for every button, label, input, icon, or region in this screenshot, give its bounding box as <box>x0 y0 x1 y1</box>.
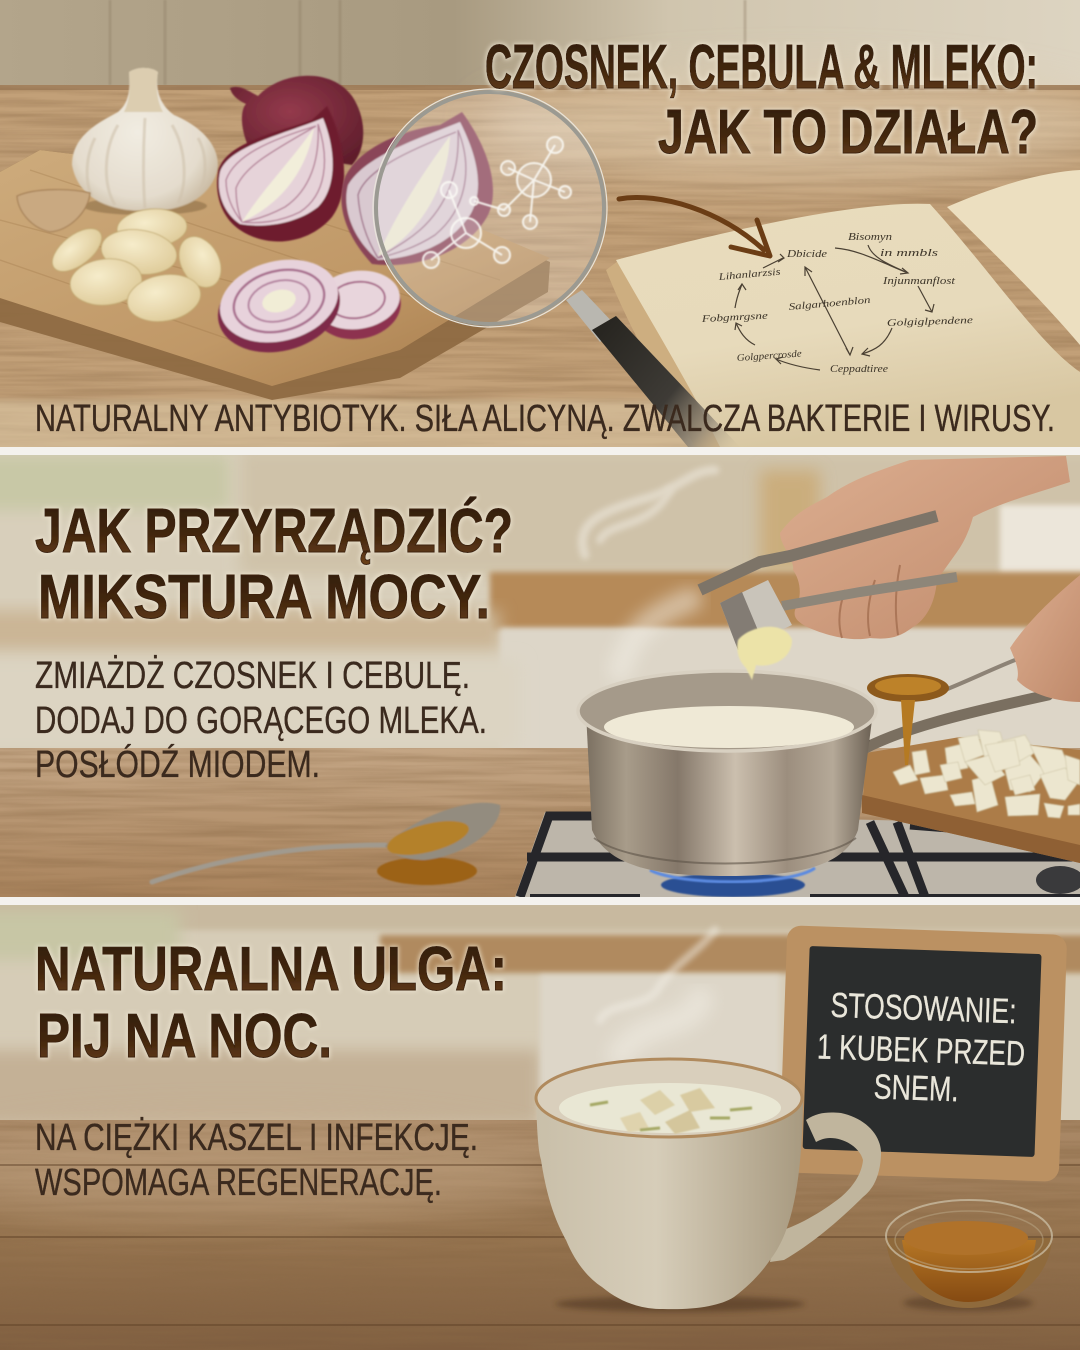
title <box>483 41 1038 157</box>
icon: hand with honey spoon <box>867 575 1080 765</box>
blurred kitchen background <box>0 450 1080 755</box>
heading <box>35 935 507 1071</box>
mug body <box>536 1098 803 1309</box>
onion bits in milk <box>590 1088 752 1134</box>
icon: garlic bulb <box>72 68 218 215</box>
garlic press <box>700 516 957 650</box>
steam <box>582 470 715 670</box>
book: right page <box>947 170 1080 345</box>
icon: peeled garlic cloves <box>52 208 222 322</box>
book with cycle diagram <box>606 170 1080 447</box>
wooden table <box>0 1120 1080 1350</box>
icon: halved red onion <box>217 106 344 242</box>
cycle diagram handwriting <box>700 232 974 375</box>
heading: PIJ NA NOC. <box>37 1002 332 1071</box>
benefits text: NA CIĘŻKI KASZEL I INFEKCJĘ. <box>35 1116 478 1159</box>
icon: glass bowl of honey <box>886 1200 1052 1311</box>
cycle diagram handwriting: Golgpercrosde <box>736 348 803 364</box>
arrow: curved brown arrow to the book <box>619 198 770 256</box>
benefits text: WSPOMAGA REGENERACJĘ. <box>35 1162 442 1204</box>
panel: how it works <box>0 0 1080 460</box>
hand <box>780 456 1070 639</box>
chalkboard sign <box>779 925 1067 1182</box>
chalkboard sign: SNEM. <box>873 1067 959 1109</box>
cycle diagram handwriting: Ceppadtiree <box>830 364 889 375</box>
cycle diagram handwriting: Dbicide <box>786 249 828 260</box>
icon: garlic clove in skin <box>17 190 90 232</box>
steam <box>600 930 715 1055</box>
cycle diagram handwriting: in mmbls <box>880 248 938 259</box>
heading: JAK PRZYRZĄDZIĆ? <box>35 497 513 566</box>
mug handle <box>770 1113 881 1262</box>
cycle diagram handwriting: Bisomyn <box>848 232 892 243</box>
icon: onion slices <box>217 258 402 354</box>
panel: how to prepare <box>0 450 1080 897</box>
cycle diagram handwriting: Fobgmrgsne <box>700 311 769 325</box>
stove and grates <box>515 812 1080 897</box>
blurred kitchen background <box>0 900 1080 1125</box>
heading: NATURALNA ULGA: <box>35 935 507 1004</box>
pan body <box>586 712 873 876</box>
icon: second halved onion under the lens <box>341 112 493 265</box>
heading <box>35 497 513 632</box>
milk surface <box>559 1083 781 1133</box>
recipe text: ZMIAŻDŻ CZOSNEK I CEBULĘ. <box>35 654 470 697</box>
icon: magnifying glass with molecules <box>373 89 740 447</box>
chopped onion <box>893 730 1080 818</box>
recipe text: POSŁÓDŹ MIODEM. <box>35 743 320 786</box>
icon: spoon on the table with honey <box>152 803 500 885</box>
benefits text <box>35 1116 478 1204</box>
magnifier handle <box>566 290 740 447</box>
icon: whole red onion <box>230 76 363 165</box>
pan handle <box>858 695 1048 752</box>
recipe text <box>35 654 487 786</box>
magnifier lens <box>373 89 607 327</box>
cutting board with chopped onion <box>862 730 1080 863</box>
milk <box>604 706 854 748</box>
saucepan with milk <box>578 671 1048 876</box>
book: left page <box>616 204 1080 447</box>
cycle diagram handwriting: Golgiglpendene <box>887 315 974 329</box>
panel: natural relief <box>0 900 1080 1350</box>
cutting board <box>0 150 550 400</box>
cycle diagram handwriting: Lihanlarzsis <box>717 267 781 283</box>
molecule glyphs <box>423 137 571 268</box>
heading: MIKSTURA MOCY. <box>38 563 490 632</box>
icon: mug of garlic milk <box>536 1059 881 1312</box>
crushed garlic <box>737 627 792 680</box>
recipe text: DODAJ DO GORĄCEGO MLEKA. <box>35 700 487 742</box>
burner flame <box>650 868 815 897</box>
mug rim <box>536 1059 802 1137</box>
pan rim <box>578 671 876 751</box>
icon: top hand with garlic press <box>700 456 1070 680</box>
chalkboard sign: STOSOWANIE: <box>830 986 1017 1031</box>
wooden table <box>0 70 1080 460</box>
blurred kitchen wall <box>0 0 1080 90</box>
cycle diagram handwriting: Injunmanflost <box>882 276 955 287</box>
wooden table <box>0 748 1080 897</box>
cycle diagram handwriting: Salgarhoenblon <box>788 295 871 313</box>
book: page edges <box>606 258 720 447</box>
